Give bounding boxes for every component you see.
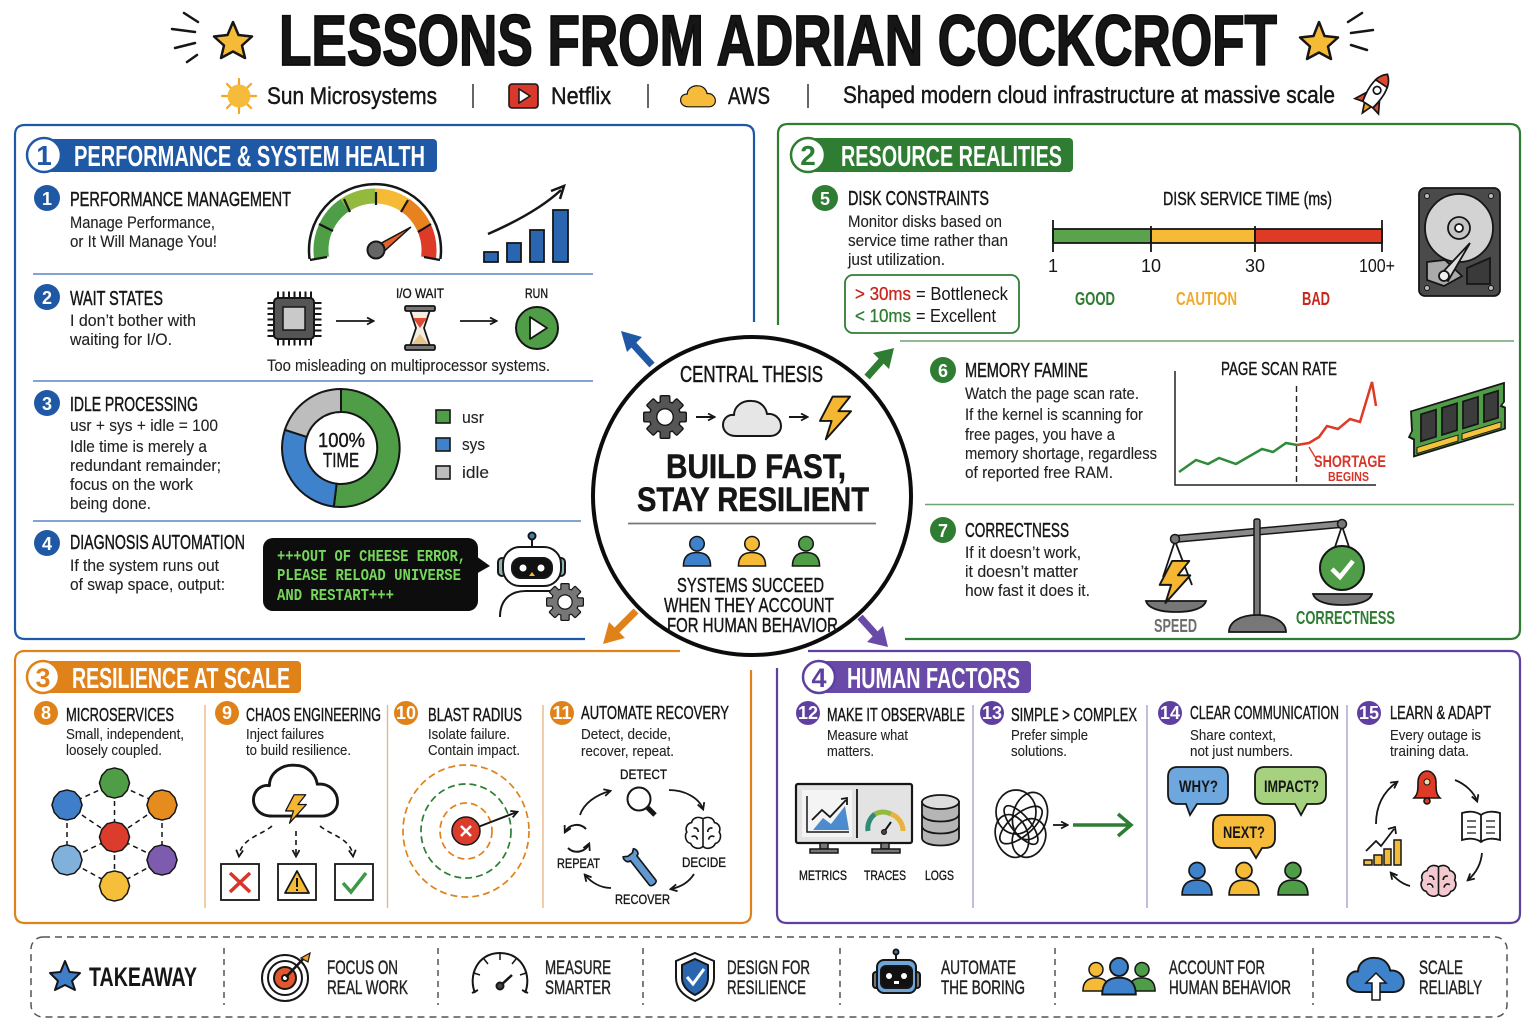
dashed frame: [31, 937, 1507, 1017]
terminal speech bubble: +++OUT OF CHEESE ERROR,: [277, 548, 466, 567]
panel border: [15, 125, 754, 639]
supporting statement: WHEN THEY ACCOUNT: [664, 595, 834, 617]
speech bubble: why: WHY?: [1179, 777, 1218, 796]
icon: hourglass: [405, 306, 435, 350]
left pan: [1146, 601, 1206, 612]
disk service time scale: [1048, 189, 1395, 309]
text block: Manage Performance,: [70, 213, 215, 232]
text block: training data.: [1390, 743, 1469, 760]
text block: just utilization.: [847, 250, 945, 269]
chart title: PAGE SCAN RATE: [1221, 359, 1337, 379]
icon: netflix play: [509, 84, 538, 108]
text block: recover, repeat.: [581, 743, 674, 760]
icon: upload cloud: [1347, 958, 1404, 1000]
subtitle row: [222, 67, 1399, 121]
chart title: DISK SERVICE TIME (ms): [1163, 189, 1332, 209]
badge: [34, 701, 58, 725]
badge: [550, 701, 574, 725]
panel heading: PERFORMANCE & SYSTEM HEALTH: [74, 141, 425, 173]
icon: shield: [676, 953, 714, 1001]
icon: left star with sparks: [172, 13, 252, 62]
scale numbers: 30: [1245, 256, 1265, 276]
text block: Small, independent,: [66, 726, 184, 743]
donut chart: [282, 389, 400, 507]
text block: Watch the page scan rate.: [965, 384, 1139, 403]
dashed failure arrows: [239, 826, 353, 856]
text block: how fast it does it.: [965, 581, 1090, 600]
heading: MEMORY FAMINE: [965, 360, 1088, 382]
text block: [965, 543, 1090, 600]
axes: [1175, 371, 1376, 485]
text block: solutions.: [1011, 743, 1067, 760]
item 13: simple over complex: [980, 701, 1137, 863]
icon: open book: [1462, 812, 1500, 842]
panel heading: [791, 138, 1073, 173]
callout: thresholds: = Bottleneck: [916, 284, 1009, 304]
icon: log database: [922, 795, 959, 846]
speech bubble: impact: IMPACT?: [1264, 777, 1319, 796]
label: run: RUN: [525, 285, 548, 301]
arrow: [336, 320, 373, 322]
text block: Measure what: [827, 727, 909, 744]
shortage label: SHORTAGE: [1314, 452, 1386, 471]
rising bar chart: [484, 186, 568, 262]
text block: [827, 727, 909, 760]
summary statement: Shaped modern cloud infrastructure at massive scale: [843, 82, 1335, 109]
icon: speedometer: [472, 953, 528, 993]
callout: thresholds: = Excellent: [916, 306, 996, 326]
badge: [930, 517, 956, 543]
icon: robot: [873, 950, 920, 993]
label: measure smarter: MEASURE: [545, 958, 611, 979]
panel heading: RESILIENCE AT SCALE: [72, 663, 290, 695]
badge: [34, 185, 60, 211]
label: focus on real work: [327, 958, 408, 999]
text block: Inject failures: [246, 726, 324, 743]
speech bubble: impact: [1255, 767, 1326, 815]
speech bubble: next: NEXT?: [1223, 823, 1265, 842]
text block: [66, 726, 184, 759]
badge: 6: [938, 361, 948, 381]
panel border: [777, 651, 1520, 923]
item 4: diagnosis automation: [34, 530, 584, 621]
zone labels: BAD: [1302, 289, 1330, 309]
text block: focus on the work: [70, 475, 193, 494]
badge: [812, 185, 838, 211]
label: account for human behavior: HUMAN BEHAVIOR: [1169, 978, 1291, 999]
badge: 9: [222, 703, 232, 723]
text block: memory shortage, regardless: [965, 444, 1157, 463]
text block: [70, 416, 221, 513]
text block: Contain impact.: [428, 742, 520, 759]
terminal speech bubble: AND RESTART+++: [277, 587, 394, 606]
circle: [593, 337, 911, 655]
marker line: [1296, 386, 1298, 485]
stage labels: [557, 766, 726, 907]
text block: [1190, 727, 1293, 760]
item 9: chaos engineering: [215, 701, 381, 900]
icon labels: TRACES: [864, 867, 906, 883]
icon: magnifier: [628, 788, 655, 815]
text block: redundant remainder;: [70, 456, 221, 475]
heading: MAKE IT OBSERVABLE: [827, 705, 965, 725]
legend: sys: [462, 435, 485, 454]
icon labels: [799, 867, 954, 883]
stage labels: RECOVER: [615, 891, 670, 907]
heading: IDLE PROCESSING: [70, 394, 198, 416]
text block: If the kernel is scanning for: [965, 405, 1143, 424]
panel heading: 2: [800, 140, 816, 171]
icon: gear: [643, 395, 687, 439]
stage labels: DETECT: [620, 766, 667, 782]
heading: BLAST RADIUS: [428, 705, 522, 725]
leader line: [1309, 447, 1315, 457]
panel heading: RESOURCE REALITIES: [841, 141, 1062, 173]
badge: [34, 530, 60, 556]
badge: [980, 701, 1004, 725]
badge: 11: [552, 703, 572, 723]
gauge: [309, 184, 441, 260]
badge: 8: [41, 703, 51, 723]
speech bubble: next: [1213, 815, 1275, 858]
item 12: make it observable: [796, 701, 965, 883]
icon: blue star: [50, 961, 80, 990]
text block: loosely coupled.: [66, 742, 162, 759]
text block: Idle time is merely a: [70, 437, 207, 456]
icon: failure cloud: [253, 765, 338, 823]
icon: robot with gear: [498, 532, 565, 617]
arrow: to resource panel: [867, 348, 894, 377]
badge: [796, 701, 820, 725]
panel heading: 1: [36, 140, 52, 171]
panel heading: 4: [811, 663, 827, 693]
item 1: performance management: [34, 184, 568, 262]
text block: it doesn’t matter: [965, 562, 1078, 581]
right pan: [1313, 594, 1372, 605]
item 3: idle processing: [34, 389, 489, 513]
icon labels: LOGS: [925, 867, 954, 883]
panel: performance and system health: [15, 125, 754, 639]
panel heading: 3: [35, 663, 51, 693]
arrow: to human factors panel: [860, 617, 888, 647]
people icons: [683, 536, 820, 566]
main message: STAY RESILIENT: [637, 481, 869, 519]
heading: MICROSERVICES: [66, 705, 174, 725]
item 8: microservices: [34, 701, 184, 901]
heading: WAIT STATES: [70, 288, 163, 310]
shortage label: [1314, 452, 1386, 484]
text block: to build resilience.: [246, 742, 351, 759]
icon: growth chart: [1364, 827, 1401, 865]
item 2: wait states: [34, 284, 558, 375]
learning cycle: [1364, 771, 1500, 896]
text block: [69, 311, 196, 349]
icon: blast target rings: [403, 765, 529, 897]
text block: Monitor disks based on: [848, 212, 1002, 231]
text block: Detect, decide,: [581, 726, 671, 743]
speech bubble: why: [1168, 767, 1228, 815]
people: [1182, 863, 1308, 895]
text block: If it doesn’t work,: [965, 543, 1081, 562]
panel heading: [803, 661, 1031, 695]
company: sun microsystems: Sun Microsystems: [267, 83, 437, 110]
icon: service mesh: [52, 768, 177, 901]
icon: pink brain: [1421, 866, 1456, 896]
zone labels: CAUTION: [1176, 289, 1237, 309]
icon: right star with sparks: [1300, 13, 1373, 59]
text block: [428, 726, 520, 759]
arrow: [696, 416, 714, 418]
icon: rocket: [1351, 67, 1399, 121]
healthy trend: [1179, 443, 1297, 472]
item 7: correctness: [930, 517, 1395, 636]
supporting statement: [664, 575, 838, 637]
company: netflix: Netflix: [551, 83, 611, 110]
main message: BUILD FAST,: [666, 448, 846, 486]
label: i/o wait: I/O WAIT: [396, 285, 444, 301]
item 15: learn and adapt: [1357, 701, 1500, 896]
badge: 2: [42, 288, 52, 308]
badge: [1158, 701, 1182, 725]
outcome: warning: [278, 864, 316, 900]
icon: cloud: [723, 401, 781, 436]
label: focus on real work: REAL WORK: [327, 978, 408, 999]
line chart: page scan rate: [1175, 359, 1386, 485]
shortage trend: [1297, 382, 1376, 445]
text block: usr + sys + idle = 100: [70, 416, 218, 435]
heading: DISK CONSTRAINTS: [848, 188, 989, 210]
heading: PERFORMANCE MANAGEMENT: [70, 189, 291, 211]
badge: 15: [1359, 703, 1379, 723]
icon: wrench: [622, 848, 660, 889]
panel heading: [27, 138, 437, 173]
cycle diagram: [557, 766, 726, 907]
cycle arrows: [1376, 780, 1482, 886]
heading: CHAOS ENGINEERING: [246, 705, 381, 725]
text block: being done.: [70, 494, 151, 513]
icon labels: METRICS: [799, 867, 847, 883]
icon: tangled scribble: [989, 788, 1053, 863]
badge: [394, 701, 418, 725]
heading: CLEAR COMMUNICATION: [1190, 703, 1339, 723]
green simple arrow: [1073, 814, 1131, 836]
donut centre label: TIME: [323, 450, 359, 472]
icon: aws cloud: [681, 86, 715, 107]
scale numbers: [1048, 256, 1395, 276]
main message: [637, 448, 869, 519]
shortage label: BEGINS: [1328, 469, 1369, 484]
label: focus on real work: FOCUS ON: [327, 958, 398, 979]
icon: cpu chip: [271, 295, 318, 342]
separators: [473, 84, 808, 108]
heading: LEARN & ADAPT: [1390, 703, 1491, 723]
text block: [847, 212, 1008, 269]
label: account for human behavior: ACCOUNT FOR: [1169, 958, 1265, 979]
text block: If the system runs out: [70, 556, 219, 575]
company: aws: AWS: [728, 83, 770, 110]
legend: [436, 408, 489, 482]
caption: Too misleading on multiprocessor systems.: [267, 356, 550, 375]
colour bar: [1053, 220, 1382, 252]
text block: not just numbers.: [1190, 743, 1293, 760]
badge: [34, 284, 60, 310]
scale numbers: 10: [1141, 256, 1161, 276]
label: speed: SPEED: [1154, 616, 1197, 636]
badge: [215, 701, 239, 725]
icon: refresh: [565, 825, 589, 852]
panel: human factors: [777, 651, 1520, 923]
text block: [581, 726, 674, 760]
text block: [70, 213, 217, 251]
arrow: [789, 416, 807, 418]
text block: of swap space, output:: [70, 575, 225, 594]
badge: [34, 390, 60, 416]
check: correctness: [1320, 546, 1364, 590]
beam and post: [1170, 519, 1346, 632]
callout: thresholds: > 30ms: [855, 284, 911, 304]
badge: 3: [42, 394, 52, 414]
badge: 10: [396, 703, 416, 723]
stage labels: DECIDE: [682, 854, 726, 870]
small arrow: [1053, 824, 1067, 826]
badge: 13: [982, 703, 1002, 723]
icon: sun: [222, 79, 256, 113]
text block: [246, 726, 351, 759]
label: measure smarter: SMARTER: [545, 978, 611, 999]
arrow: to resilience panel: [603, 611, 636, 644]
label: scale reliably: [1419, 958, 1482, 999]
panel heading: HUMAN FACTORS: [847, 663, 1020, 695]
badge: 4: [42, 534, 52, 554]
icon: run play button: [516, 307, 558, 349]
donut centre label: [318, 430, 365, 472]
supporting statement: SYSTEMS SUCCEED: [677, 575, 824, 597]
text block: Share context,: [1190, 727, 1276, 744]
text block: or It Will Manage You!: [70, 232, 217, 251]
text block: of reported free RAM.: [965, 463, 1113, 482]
scale numbers: 1: [1048, 256, 1058, 276]
icon: ram stick: [1409, 383, 1505, 458]
text block: Isolate failure.: [428, 726, 510, 743]
takeaway heading: TAKEAWAY: [89, 962, 197, 992]
panel: central thesis: [593, 337, 911, 655]
badge: 1: [42, 189, 52, 209]
text block: Every outage is: [1390, 727, 1481, 744]
label: correctness: CORRECTNESS: [1296, 608, 1395, 628]
badge: 14: [1160, 703, 1180, 723]
label: design for resilience: DESIGN FOR: [727, 958, 810, 979]
badge: 5: [820, 189, 830, 209]
text block: service time rather than: [848, 231, 1008, 250]
badge: 7: [938, 521, 948, 541]
text block: [1011, 727, 1088, 760]
label: automate the boring: THE BORING: [941, 978, 1025, 999]
text block: [965, 384, 1157, 482]
callout: thresholds: < 10ms: [855, 306, 911, 326]
badge: [1357, 701, 1381, 725]
supporting statement: FOR HUMAN BEHAVIOR: [667, 615, 838, 637]
item 10: blast radius: [394, 701, 529, 897]
icon: robot gear: [546, 583, 584, 621]
icon: hard disk: [1419, 188, 1500, 296]
icon: balance scale: [1146, 519, 1372, 632]
badge: [930, 357, 956, 383]
item 11: automate recovery: [550, 701, 729, 907]
icon: alarm bell: [1414, 771, 1440, 804]
text block: matters.: [827, 743, 874, 760]
zone labels: [1075, 289, 1330, 309]
zone labels: GOOD: [1075, 289, 1115, 309]
label: scale reliably: RELIABLY: [1419, 978, 1482, 999]
panel border: [778, 124, 1520, 639]
bolt: speed: [1160, 561, 1190, 603]
scale numbers: 100+: [1359, 256, 1395, 276]
donut centre label: 100%: [318, 430, 365, 452]
panel heading: [27, 661, 301, 695]
label: design for resilience: [727, 958, 810, 999]
badge: 12: [798, 703, 818, 723]
icon: target: [262, 953, 310, 1001]
legend: usr: [462, 408, 484, 427]
label: automate the boring: [941, 958, 1025, 999]
heading: CENTRAL THESIS: [680, 361, 823, 387]
icon: lightning bolt: [820, 397, 851, 439]
panel border: [15, 651, 751, 923]
panel: takeaway strip: [31, 937, 1507, 1017]
label: automate the boring: AUTOMATE: [941, 958, 1016, 979]
heading: DIAGNOSIS AUTOMATION: [70, 532, 245, 554]
cycle arrows: [580, 790, 703, 889]
label: scale reliably: SCALE: [1419, 958, 1463, 979]
text block: [70, 556, 225, 594]
text block: Prefer simple: [1011, 727, 1088, 744]
text block: I don’t bother with: [70, 311, 196, 330]
legend: idle: [462, 463, 489, 482]
item 6: memory famine: [930, 357, 1505, 485]
panel: resilience at scale: [15, 651, 751, 923]
terminal speech bubble: PLEASE RELOAD UNIVERSE: [277, 567, 461, 586]
arrow: to performance panel: [621, 331, 652, 365]
label: design for resilience: RESILIENCE: [727, 978, 806, 999]
text block: [1390, 727, 1481, 760]
terminal speech bubble: [263, 538, 490, 611]
item 5: disk constraints: [812, 185, 1500, 333]
label: measure smarter: [545, 958, 611, 999]
stage labels: REPEAT: [557, 855, 600, 871]
heading: CORRECTNESS: [965, 520, 1069, 542]
callout: thresholds: [845, 275, 1019, 333]
outcome: success: [335, 864, 373, 900]
heading: SIMPLE > COMPLEX: [1011, 705, 1137, 725]
text block: free pages, you have a: [965, 425, 1115, 444]
icon: brain: [686, 817, 720, 848]
arrow: [460, 320, 496, 322]
panel: resource realities: [778, 124, 1520, 639]
text block: waiting for I/O.: [69, 330, 172, 349]
icon: team: [1083, 958, 1155, 994]
outcome: fail: [221, 864, 259, 900]
item 14: clear communication: [1158, 701, 1339, 895]
heading: AUTOMATE RECOVERY: [581, 703, 729, 723]
icon: monitor dashboards: [796, 784, 912, 853]
label: account for human behavior: [1169, 958, 1291, 999]
